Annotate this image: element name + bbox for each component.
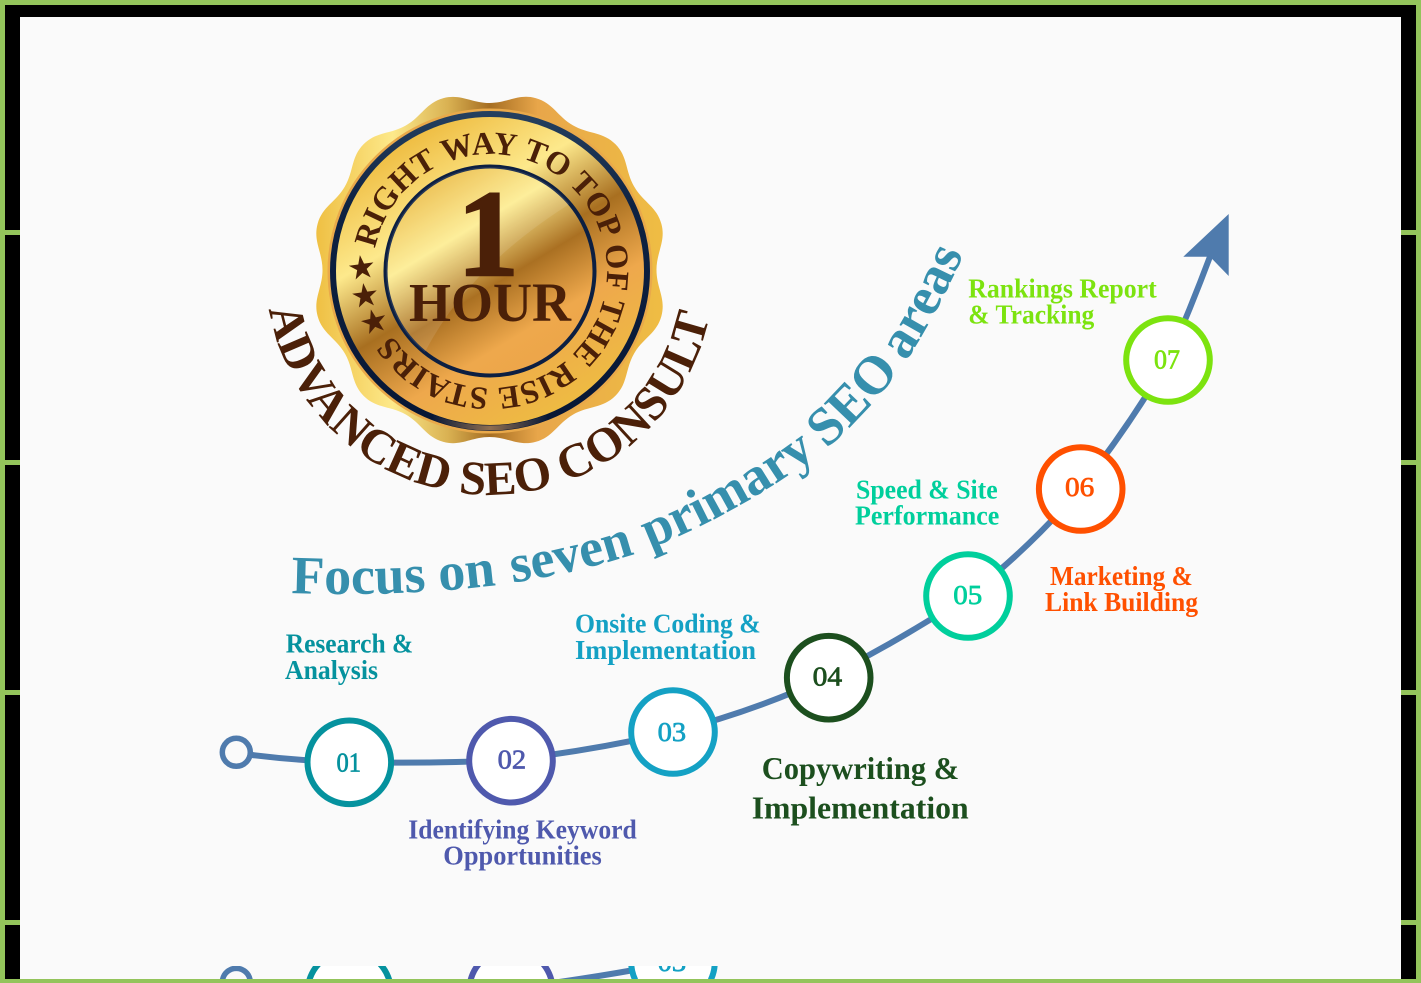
- step 06: [1039, 447, 1122, 531]
- step 06 label: [1045, 561, 1198, 617]
- badge sheen: [386, 167, 570, 352]
- step 02 label: [408, 815, 637, 871]
- step 05: [926, 554, 1010, 638]
- step 02 label: Opportunities: [443, 841, 602, 871]
- step 03: [631, 690, 715, 774]
- badge bottom highlight: [433, 417, 547, 428]
- step 07 label: Rankings Report: [968, 274, 1157, 304]
- gold badge: [316, 96, 663, 444]
- badge stars: [348, 253, 389, 335]
- badge ring text: RIGHT WAY TO TOP OF THE RISE STAIRS: [354, 132, 628, 409]
- repeated route sliver at bottom edge: 03: [658, 947, 686, 977]
- step 06: 06: [1065, 472, 1094, 502]
- step 07 label: & Tracking: [968, 299, 1095, 329]
- step 07 label: [968, 274, 1157, 329]
- step 03: 03: [658, 717, 686, 747]
- step 04 label: [752, 750, 969, 825]
- step 01: [308, 720, 391, 804]
- arrowhead: [1183, 214, 1229, 276]
- step 05 label: Performance: [855, 501, 999, 531]
- step 01 label: Analysis: [285, 655, 378, 685]
- step 06 label: Marketing &: [1050, 561, 1193, 591]
- badge inner disc: [386, 166, 594, 376]
- step 05 label: Speed & Site: [856, 475, 998, 505]
- step 06 label: Link Building: [1045, 587, 1198, 617]
- step 07: 07: [1154, 344, 1180, 374]
- step 03 label: [575, 609, 761, 665]
- step 01 label: [285, 629, 413, 685]
- route start marker: [222, 738, 250, 766]
- badge outer rim: [329, 110, 651, 432]
- badge hour label: HOUR: [409, 272, 572, 333]
- step 05: 05: [953, 580, 982, 610]
- step 04: [787, 636, 870, 720]
- badge numeral: 1: [457, 165, 519, 302]
- rising route line: [252, 254, 1211, 763]
- repeated route sliver at bottom edge: [220, 966, 718, 979]
- step 07: [1126, 318, 1210, 402]
- curved heading: focus on seven primary seo areas: Focus on seven primary SEO areas: [292, 246, 961, 594]
- step 03 label: Implementation: [575, 635, 756, 665]
- step 02: [469, 719, 553, 802]
- badge ring band: [333, 114, 647, 428]
- step 01: 01: [336, 748, 361, 778]
- badge scalloped edge: [310, 90, 670, 450]
- step 04 label: Implementation: [752, 789, 969, 825]
- step 01 label: Research &: [286, 629, 413, 659]
- step 02 label: Identifying Keyword: [408, 815, 637, 845]
- curved heading: advanced seo consult: ADVANCED SEO CONSULT: [268, 308, 708, 496]
- step 02: 02: [498, 744, 526, 774]
- step 04: 04: [813, 662, 843, 692]
- step 04 label: Copywriting &: [762, 750, 959, 786]
- step 05 label: [855, 475, 999, 531]
- step 03 label: Onsite Coding &: [575, 609, 761, 639]
